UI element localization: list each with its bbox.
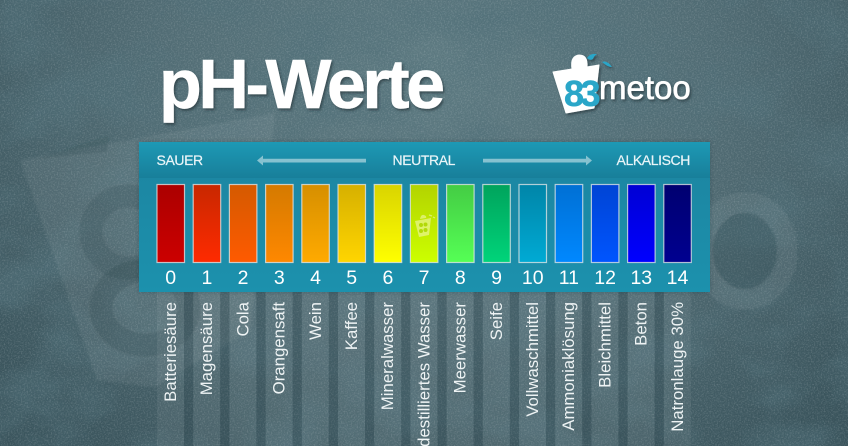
logo splash (587, 54, 612, 67)
substance labels: Mineralwasser (378, 302, 397, 410)
scale numbers: 0 (165, 267, 176, 289)
heading: sauer: SAUER (156, 152, 203, 168)
substance labels: destilliertes Wasser (414, 302, 433, 446)
arrow: left (257, 156, 366, 166)
substance labels: Ammoniaklösung (559, 302, 578, 431)
logo word: metoo (599, 69, 691, 106)
icon: cup (553, 55, 599, 113)
scale numbers: 12 (594, 267, 616, 289)
scale numbers: 14 (667, 267, 688, 289)
scale numbers: 10 (522, 267, 544, 289)
substance labels: Beton (632, 302, 651, 346)
scale numbers: 13 (630, 267, 652, 289)
substance labels: Bleichmittel (595, 302, 614, 388)
arrow: right (483, 156, 592, 166)
scale numbers: 3 (274, 267, 285, 289)
substance labels: Magensäure (197, 302, 216, 395)
substance labels: Vollwaschmittel (523, 302, 542, 417)
scale numbers: 1 (201, 267, 212, 289)
colour swatches (157, 184, 691, 262)
title: pH-Werte (159, 45, 443, 123)
scale numbers (165, 267, 688, 289)
label columns (157, 292, 691, 446)
substance labels: Batteriesäure (161, 302, 180, 402)
substance labels (161, 301, 687, 446)
heading: neutral: NEUTRAL (392, 152, 456, 168)
substance labels: Wein (306, 302, 325, 340)
scale numbers: 7 (419, 267, 430, 289)
substance labels: Kaffee (342, 302, 361, 350)
substance labels: Cola (233, 301, 252, 337)
scale numbers: 5 (346, 267, 357, 289)
scale numbers: 6 (382, 267, 393, 289)
substance labels: Seife (487, 302, 506, 340)
substance labels: Orangensaft (270, 302, 289, 394)
scale numbers: 8 (455, 267, 466, 289)
substance labels: Meerwasser (451, 302, 470, 393)
scale numbers: 11 (559, 267, 579, 289)
logo numerals: 83 (564, 73, 600, 114)
icon: small cup on pH 7 (415, 215, 435, 237)
substance labels: Natronlauge 30% (668, 302, 687, 432)
panel: pH scale (139, 142, 710, 292)
scale numbers: 9 (491, 267, 502, 289)
scale numbers: 4 (310, 267, 321, 289)
logo: 83metoo (553, 54, 691, 114)
heading: alkalisch: ALKALISCH (616, 152, 690, 168)
watermark: large cup with 83 (20, 113, 275, 387)
watermark: ring at right (702, 202, 788, 300)
scale numbers: 2 (238, 267, 249, 289)
